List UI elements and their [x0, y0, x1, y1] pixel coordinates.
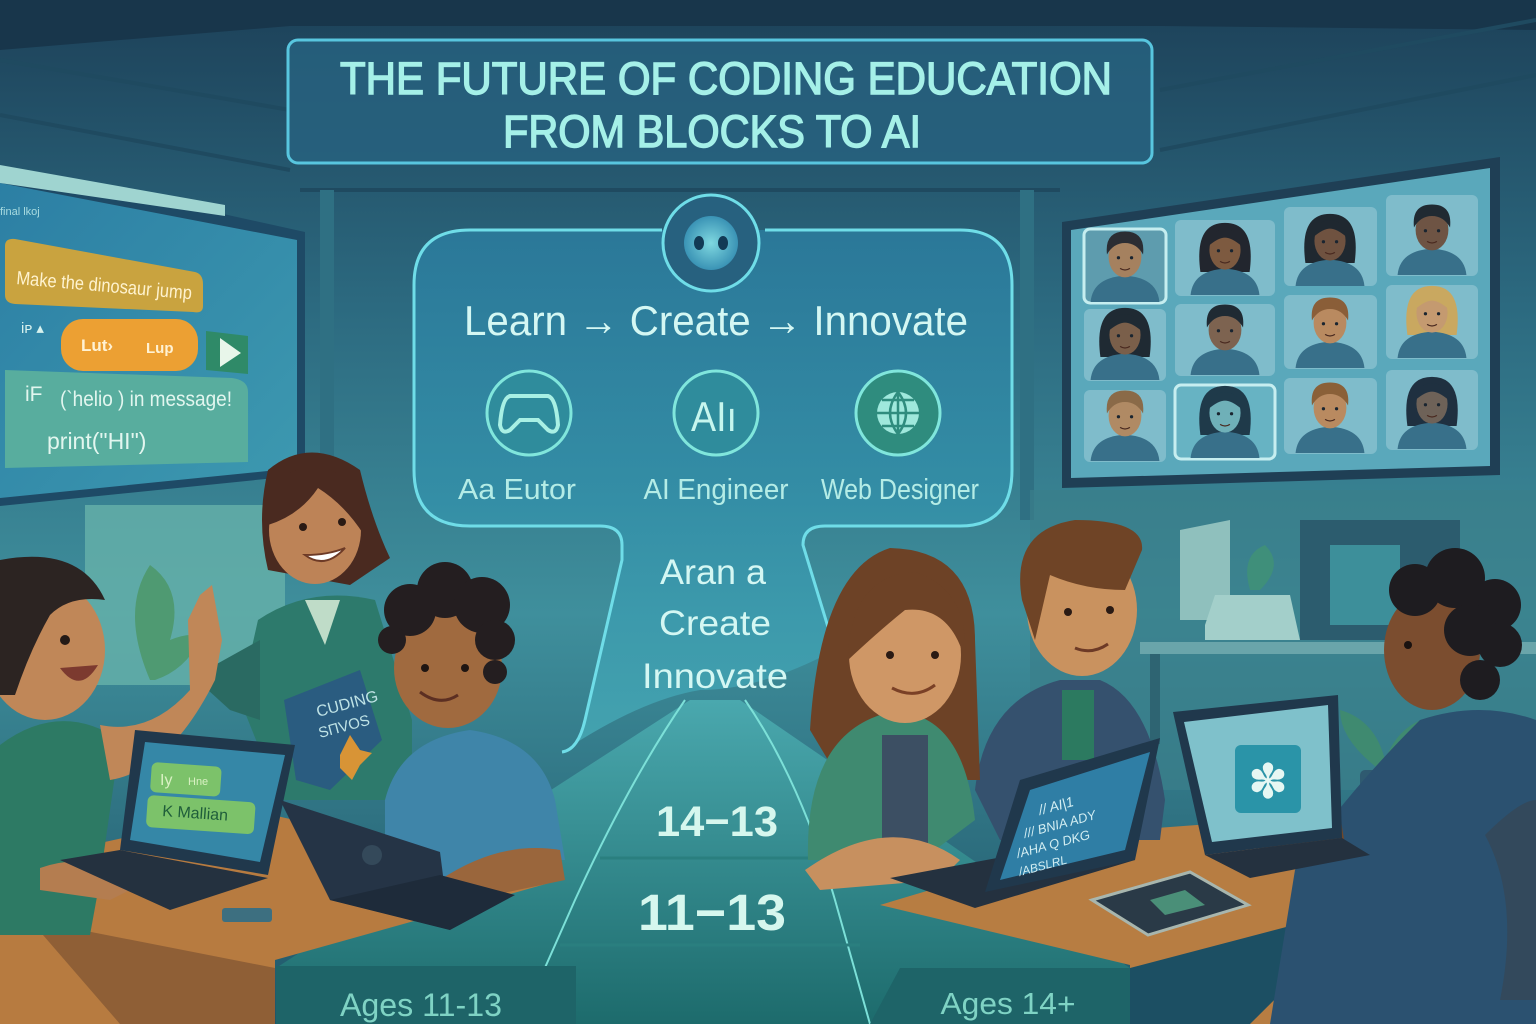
code block: if message: print("HI")	[47, 428, 146, 454]
right laptop dark text	[890, 738, 1160, 908]
code block: loop and play	[21, 319, 248, 374]
left laptop with blocks: Iy	[160, 772, 172, 789]
age label left: Ages 11-13	[340, 987, 502, 1023]
right girl student	[805, 548, 980, 890]
title banner	[288, 40, 1152, 163]
right laptop flower: ✽	[1248, 756, 1288, 809]
teacher with book	[208, 452, 412, 800]
title text: THE FUTURE OF CODING EDUCATION	[340, 53, 1112, 104]
icon: game controller	[487, 371, 571, 455]
tablet	[1092, 872, 1248, 935]
right laptop dark text: // AI|1	[1036, 793, 1075, 818]
icon: globe	[856, 371, 940, 455]
back shelf with 3D printer and plant	[1140, 520, 1536, 744]
plant on right table	[1340, 710, 1440, 810]
right wall video grid	[1062, 157, 1500, 488]
role labels: Aa Eutor	[458, 474, 576, 506]
left student high five	[0, 557, 222, 935]
book: CUDING	[315, 688, 380, 721]
funnel text	[642, 553, 788, 696]
code block: dinosaur jump: Make the dinosaur jump	[16, 268, 193, 304]
funnel text: Innovate	[642, 657, 788, 696]
funnel text: Aran a	[660, 553, 767, 592]
left desk	[0, 810, 576, 1024]
right desk	[870, 810, 1536, 1024]
left laptop with blocks: K Mallian	[162, 803, 229, 825]
left wall screen with code: final lkoj	[0, 206, 40, 218]
video tiles	[1084, 195, 1478, 462]
book	[284, 670, 382, 790]
boy in blue shirt	[378, 562, 565, 900]
central panel	[414, 195, 1012, 752]
code block: if message	[5, 370, 248, 468]
code block: if message: (`helio ) in message!	[60, 388, 232, 411]
role labels	[458, 474, 979, 506]
tagline: Learn → Create → Innovate	[464, 297, 968, 344]
age numbers on path	[638, 798, 786, 941]
role labels: AI Engineer	[644, 474, 789, 506]
funnel text: Create	[659, 604, 771, 643]
right dark student	[1255, 548, 1536, 1024]
icon: AI: AIı	[691, 393, 737, 440]
role labels: Web Designer	[821, 474, 979, 506]
left laptop with blocks: Hne	[188, 776, 208, 788]
title text	[340, 53, 1112, 157]
right laptop dark text: /AHA Q DKG	[1014, 827, 1092, 861]
code block: loop and play: Lup	[146, 340, 174, 357]
chair	[1485, 800, 1536, 1000]
code block: loop and play: Lut›	[81, 336, 113, 355]
code block: dinosaur jump	[5, 239, 203, 312]
title text: FROM BLOCKS TO AI	[503, 106, 921, 157]
left wall screen with code	[0, 165, 305, 506]
icon: AI	[674, 371, 758, 455]
right laptop flower	[1173, 695, 1370, 878]
dark laptop	[280, 800, 515, 930]
book: SΠVOS	[317, 712, 372, 742]
left laptop with blocks	[60, 730, 295, 922]
age label right: Ages 14+	[940, 986, 1076, 1021]
robot head icon	[663, 195, 759, 291]
age numbers on path: 11−13	[638, 884, 786, 941]
code block: if message: iF	[25, 383, 42, 406]
right laptop dark text: /ABSLRL	[1016, 853, 1068, 879]
right laptop dark text: /// BNIA ADY	[1021, 807, 1099, 841]
right boy student	[975, 520, 1165, 840]
age numbers on path: 14−13	[656, 798, 778, 846]
code block: loop and play: iᴘ ▴	[21, 320, 44, 337]
central glowing funnel lower path	[276, 700, 1130, 1024]
